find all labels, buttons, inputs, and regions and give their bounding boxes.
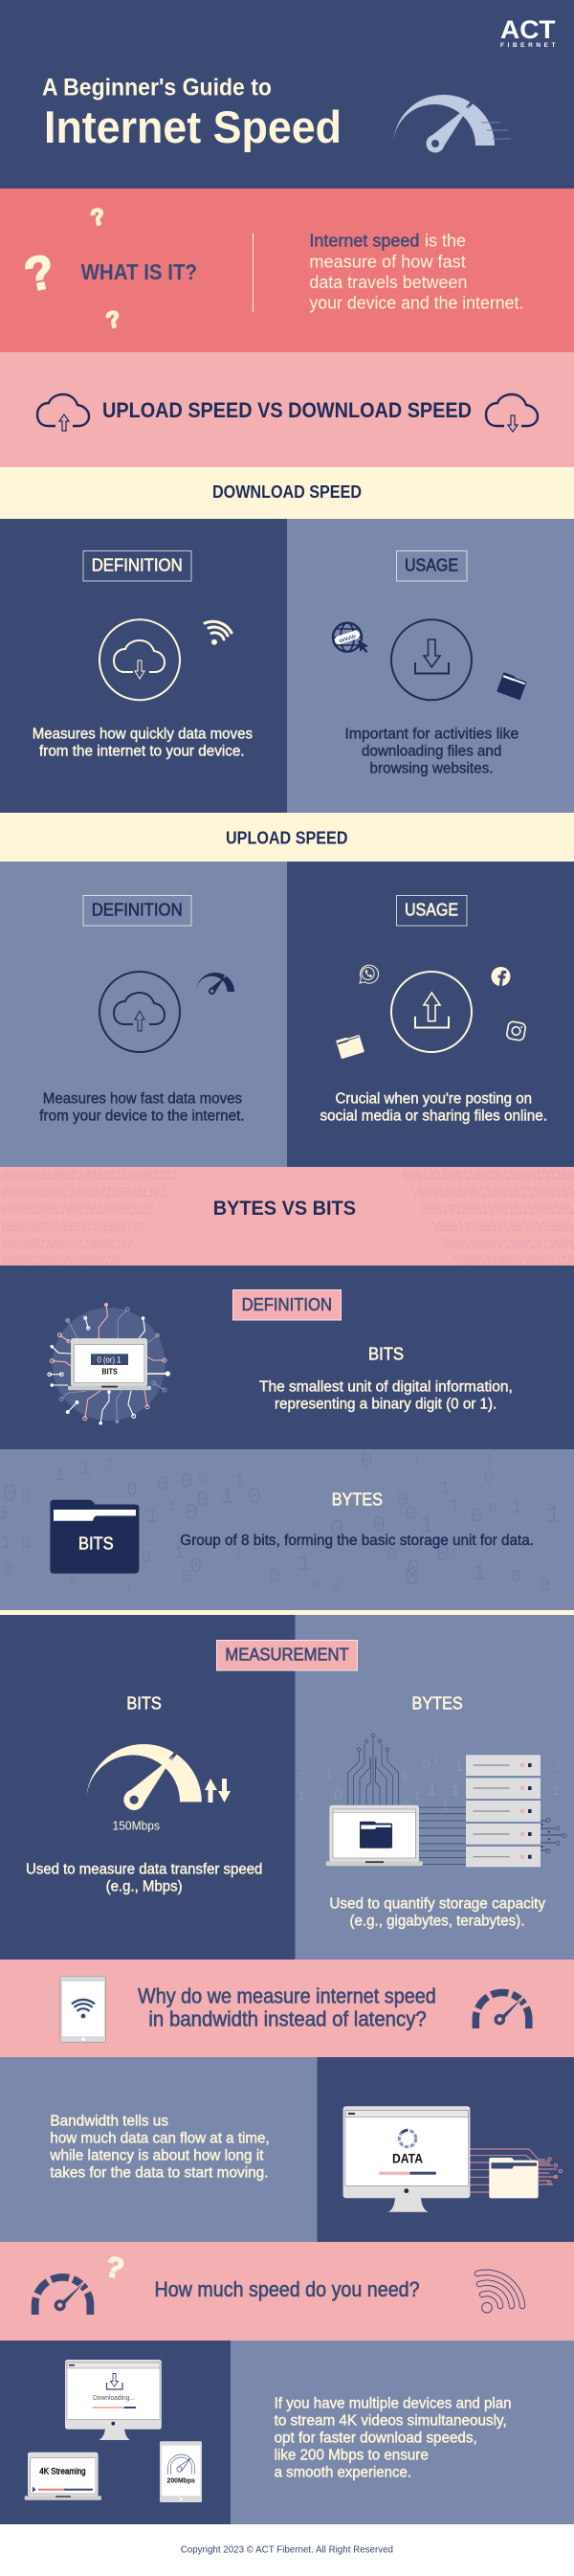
monitor: data (343, 2106, 470, 2212)
panel: bandwidth explanation: takes for the data to start moving. (50, 2164, 269, 2181)
panel: devices illustration (0, 2341, 231, 2524)
icon: www globe (333, 623, 368, 653)
panel: bytes definition: 0 (541, 1578, 550, 1597)
text: download usage (344, 727, 519, 777)
badge: usage: USAGE (405, 901, 458, 920)
badge: usage (396, 896, 467, 926)
panel: bandwidth explanation: Bandwidth tells us (50, 2113, 168, 2129)
panel: measurement bytes: 1 (553, 1783, 560, 1798)
panel: bytes definition: 1 (473, 1561, 486, 1587)
icon: segmented gauge (35, 2277, 90, 2315)
text: download usage: downloading files and (362, 744, 501, 760)
panel: bytes definition: 0 (180, 1470, 193, 1494)
icon: cloud download (486, 394, 538, 432)
panel: bytes definition: 0 (487, 1452, 495, 1467)
icon: question marks: ? (88, 203, 107, 232)
text: upload usage (320, 1090, 547, 1124)
panel: download usage (287, 519, 574, 813)
icon: wifi (205, 621, 232, 645)
badge: definition: DEFINITION (92, 901, 183, 920)
panel: bytes definition: 0 (404, 1563, 419, 1592)
text: bits measurement: (e.g., Mbps) (106, 1878, 183, 1894)
panel: bytes vs bits heading: 00000100011000101100001101 (0, 1201, 158, 1219)
badge: definition (83, 551, 191, 581)
panel: measurement bytes: 1 (414, 1789, 421, 1803)
illustration: laptop with circuit (48, 1303, 170, 1424)
panel: bytes definition: 0 (185, 1501, 198, 1527)
text: download usage: browsing websites. (369, 761, 494, 777)
panel: measurement bytes: 0 (402, 1772, 408, 1783)
panel: bandwidth illustration (318, 2057, 574, 2242)
heading: why bandwidth: in bandwidth instead of latency? (148, 2006, 427, 2030)
panel: bytes definition: 0 (333, 1579, 341, 1594)
heading: why bandwidth: Why do we measure internet speed (138, 1983, 436, 2007)
panel: download speed heading: DOWNLOAD SPEED (212, 482, 362, 502)
text: download definition: from the internet to your device. (39, 744, 245, 760)
panel: bytes definition: 0 (407, 1557, 420, 1582)
panel: measurement bytes: 1 (298, 1789, 305, 1803)
panel: bytes definition: 0 (397, 1490, 408, 1512)
text: bits definition: The smallest unit of digital information, (259, 1379, 513, 1396)
panel: bandwidth explanation: while latency is about how long it (49, 2147, 264, 2163)
heading: what is it: WHAT IS IT? (81, 259, 197, 284)
panel: bytes definition: 1 (124, 1579, 132, 1593)
panel: bytes definition: 0 (21, 1489, 31, 1506)
monitor: downloading (65, 2360, 162, 2440)
text: bits measurement (26, 1861, 262, 1894)
text: internet speed definition: your device and the internet. (309, 293, 523, 313)
text: upload usage: social media or sharing files online. (320, 1108, 547, 1124)
panel: measurement bytes: 0 (423, 1757, 430, 1771)
panel: bytes definition: 1 (511, 1497, 522, 1519)
panel: bytes definition: 0 (198, 1470, 208, 1488)
icon: whatsapp (360, 965, 378, 983)
panel: bytes definition: 1 (0, 1533, 11, 1555)
panel: bytes definition: 1 (145, 1505, 159, 1529)
panel: speed advice: like 200 Mbps to ensure (275, 2448, 429, 2464)
text: bits definition (259, 1379, 513, 1413)
icon: folder (336, 1034, 364, 1059)
badge: measurement (216, 1641, 358, 1670)
panel: speed advice (231, 2341, 574, 2524)
laptop: 4K streaming: 4K Streaming (39, 2466, 86, 2476)
panel: bytes definition: 0 (182, 1568, 191, 1587)
panel: speed advice: If you have multiple devices and plan (275, 2396, 512, 2412)
icon: download in circle (391, 619, 472, 700)
panel: bytes definition: 1 (168, 1499, 176, 1514)
text: download definition (33, 727, 253, 760)
panel: bytes definition: 1 (106, 1456, 114, 1471)
panel: bytes definition: 1 (220, 1485, 233, 1511)
panel: bytes definition: 1 (439, 1478, 451, 1500)
badge: definition: DEFINITION (242, 1295, 332, 1314)
heading: bytes: BYTES (332, 1490, 383, 1510)
panel: bytes definition: 0 (196, 1489, 210, 1514)
panel: bytes definition: 0 (248, 1485, 261, 1511)
text: bits measurement: Used to measure data transfer speed (26, 1861, 262, 1877)
panel: upload usage (287, 862, 574, 1167)
heading: bits: BITS (126, 1694, 162, 1714)
panel: header (0, 0, 574, 189)
panel: measurement bytes: 1 (428, 1782, 436, 1799)
icon: cloud upload (37, 394, 89, 431)
panel: bytes vs bits heading: 00100011000101100001101 (0, 1252, 124, 1269)
panel: measurement bits (0, 1615, 295, 1960)
panel: bytes definition: 0 (488, 1500, 497, 1517)
panel: measurement bytes: 1 (433, 1757, 438, 1766)
badge: definition (233, 1290, 341, 1320)
panel: bytes vs bits heading: 000000100011000101100001101 (0, 1184, 169, 1201)
panel: bytes definition: 0 (451, 1546, 458, 1559)
panel: upload vs download (0, 352, 574, 467)
icon: cloud upload in circle (99, 972, 180, 1052)
panel: bytes definition: 0 (310, 1577, 320, 1594)
panel: download speed heading (0, 467, 574, 519)
panel: bytes definition: 0 (372, 1513, 386, 1539)
panel: bytes vs bits heading (0, 1167, 574, 1269)
panel: bytes definition: 1 (413, 1453, 421, 1467)
text: internet speed definition: is the (425, 230, 466, 251)
panel: bytes definition: 0 (126, 1480, 138, 1502)
text: bytes measurement (329, 1895, 545, 1929)
panel: bytes definition: 1 (448, 1495, 461, 1519)
title: Internet Speed (44, 101, 342, 152)
panel: bytes definition: 1 (298, 1552, 311, 1578)
panel: bytes definition: 0 (512, 1568, 521, 1587)
panel: bytes definition: 0 (470, 1505, 483, 1529)
panel: bytes definition: 1 (173, 1543, 185, 1565)
text: internet speed definition: data travels between (309, 272, 467, 292)
laptop: 4K streaming (25, 2453, 101, 2500)
logo: ACT Fibernet: FIBERNET (500, 42, 556, 49)
icon: upload in circle (391, 972, 472, 1052)
panel: measurement bytes: 0 (334, 1787, 342, 1803)
panel: bytes definition: 0 (436, 1542, 450, 1568)
panel: bytes definition: 0 (269, 1566, 280, 1588)
panel: measurement bytes (295, 1615, 574, 1960)
panel: why bandwidth heading (0, 1960, 574, 2057)
icon: segmented gauge (475, 1992, 529, 2028)
text: bytes measurement: (e.g., gigabytes, terabytes). (350, 1913, 524, 1929)
panel: bytes definition: 1 (55, 1467, 65, 1486)
panel: bytes definition: 0 (157, 1474, 168, 1496)
text: upload definition: from your device to the internet. (39, 1108, 245, 1124)
logo: ACT Fibernet: ACT (500, 15, 556, 44)
icon: wifi outline (477, 2273, 522, 2313)
icon: small gauge (196, 972, 234, 995)
icon: www globe: www (338, 633, 358, 645)
panel: bytes definition: 1 (545, 1501, 561, 1530)
panel: bytes vs bits heading: 000100011000101100001101 (0, 1236, 136, 1253)
icon: instagram (506, 1021, 526, 1041)
panel: bytes definition: 0 (3, 1561, 12, 1580)
icon: question marks (20, 203, 122, 334)
panel: upload definition (0, 862, 287, 1167)
monitor: data: DATA (392, 2152, 423, 2166)
panel: speed advice: to stream 4K videos simultaneously, (275, 2413, 507, 2430)
tablet: 200Mbps: 200Mbps (166, 2475, 195, 2484)
text: internet speed definition (309, 230, 523, 313)
badge: usage: USAGE (405, 556, 458, 575)
text: upload definition: Measures how fast data moves (43, 1090, 242, 1107)
panel: bytes definition: 0 (329, 1515, 344, 1544)
text: internet speed definition: measure of how fast (309, 251, 466, 272)
panel: bytes vs bits heading: 0000000100011000101100001101 (0, 1167, 181, 1184)
badge: usage (396, 551, 467, 581)
panel: bytes definition: 0 (2, 1480, 17, 1509)
text: download definition: Measures how quickly data moves (33, 727, 253, 743)
icon: question mark: ? (102, 2251, 127, 2286)
icon: gauge (86, 1741, 202, 1810)
heading: how much speed: How much speed do you need? (155, 2277, 420, 2301)
panel: measurement bytes: 1 (442, 1798, 449, 1812)
panel: bytes definition: 0 (69, 1575, 77, 1588)
panel: upload speed heading (0, 813, 574, 862)
icon: folder labelled bits: BITS (78, 1534, 114, 1554)
title (42, 75, 342, 152)
icon: folder (497, 672, 527, 700)
panel: measurement bytes: 1 (452, 1782, 459, 1799)
panel: how much speed heading (0, 2242, 574, 2341)
heading: bits: BITS (368, 1344, 404, 1363)
icon: folder (489, 2158, 539, 2198)
panel: bytes definition: 1 (78, 1457, 92, 1481)
icon: tablet with wifi (60, 1976, 106, 2043)
icon: up down arrows (205, 1779, 231, 1803)
illustration: laptop with circuit: BITS (101, 1366, 118, 1376)
panel: bytes definition: 1 (235, 1545, 243, 1560)
panel: measurement bytes: 1 (325, 1766, 333, 1781)
panel: speed advice: a smooth experience. (275, 2465, 411, 2481)
panel: measurement bytes: 1 (556, 1761, 561, 1771)
panel: measurement bytes: 1 (454, 1758, 463, 1775)
panel: bytes vs bits heading: 0000100011000101100001101 (0, 1219, 147, 1236)
panel: what is it (0, 189, 574, 352)
panel: bits definition (0, 1266, 574, 1449)
badge: measurement: MEASUREMENT (225, 1645, 349, 1664)
panel: speed advice: opt for faster download speeds, (275, 2430, 477, 2447)
panel: bytes definition: 1 (420, 1513, 433, 1539)
panel: upload speed heading: UPLOAD SPEED (226, 828, 348, 847)
panel: bytes definition: 0 (484, 1468, 494, 1488)
heading: upload vs download: UPLOAD SPEED VS DOWNLOAD SPEED (102, 398, 472, 422)
text: download usage: Important for activities like (344, 727, 519, 743)
panel: bytes definition: 0 (405, 1504, 416, 1526)
label: 150Mbps: 150Mbps (113, 1820, 160, 1833)
icon: cloud download in circle (99, 619, 180, 700)
panel: bandwidth explanation (0, 2057, 318, 2242)
icon: folder labelled bits (50, 1500, 139, 1574)
title: A Beginner's Guide to (42, 75, 272, 101)
servers (466, 1755, 541, 1867)
panel: bytes definition: 0 (142, 1549, 151, 1568)
text: upload usage: Crucial when you're posting on (335, 1090, 532, 1107)
illustration: laptop connected to servers (326, 1734, 566, 1867)
icon: facebook (492, 967, 511, 987)
panel: download definition (0, 519, 287, 813)
panel: bytes definition: 0 (21, 1534, 31, 1554)
heading: why bandwidth (138, 1983, 436, 2030)
panel: measurement bytes: 0 (402, 1797, 409, 1812)
text: bytes definition: Group of 8 bits, forming the basic storage unit for data. (180, 1533, 534, 1549)
tablet: 200Mbps (160, 2441, 202, 2502)
heading: bytes: BYTES (411, 1694, 463, 1714)
footer: copyright: Copyright 2023 © ACT Fibernet. All Right Reserved (181, 2544, 393, 2556)
illustration: laptop with circuit: 0 (or) 1 (98, 1355, 121, 1364)
panel: bytes definition (0, 1449, 574, 1610)
icon: question marks: ? (20, 244, 59, 302)
panel: bytes vs bits heading: BYTES VS BITS (213, 1197, 356, 1220)
icon: speedometer (393, 92, 511, 153)
text: internet speed definition: Internet speed (309, 230, 419, 251)
panel: bytes definition: 1 (234, 1472, 244, 1491)
panel: measurement bytes: 1 (300, 1766, 305, 1776)
monitor: downloading: Downloading... (93, 2393, 135, 2402)
panel: bytes definition: 0 (360, 1449, 373, 1473)
badge: definition (83, 896, 191, 926)
icon: question marks: ? (103, 306, 122, 334)
text: bits definition: representing a binary digit (0 or 1). (275, 1397, 497, 1413)
text: upload definition (39, 1090, 245, 1124)
panel: bytes definition: 0 (189, 1555, 203, 1579)
text: bytes measurement: Used to quantify storage capacity (329, 1895, 545, 1912)
badge: definition: DEFINITION (92, 556, 183, 575)
panel: bandwidth explanation: how much data can flow at a time, (50, 2130, 270, 2146)
panel: bytes definition: 0 (386, 1545, 398, 1567)
